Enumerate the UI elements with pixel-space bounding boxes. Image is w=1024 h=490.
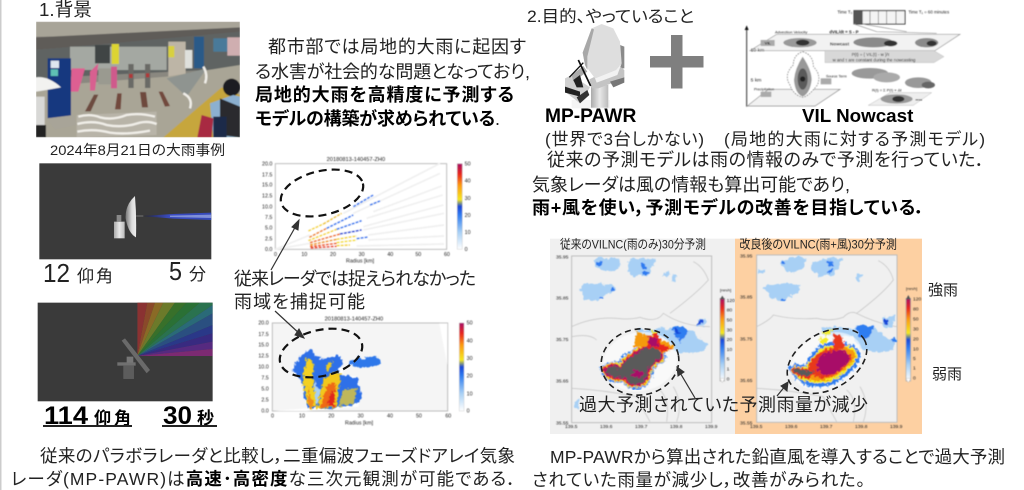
panel: conventional VILNC forecast map: 35.55 <box>556 420 569 426</box>
chart: conventional radar cross-section: 5.0 <box>265 226 272 232</box>
panel: improved VILNC forecast map: 35.75 <box>740 336 753 342</box>
chart: MP-PAWR cross-section: 15.0 <box>258 343 269 349</box>
label: 114 elevation angles: 114 <box>44 402 88 430</box>
chart: MP-PAWR cross-section: 10 <box>467 391 473 397</box>
caption: 2024 heavy rain case: 2024年8月21日の大雨事例 <box>50 142 225 158</box>
text block: MP-PAWR comparison: レーダ(MP-PAWR)は高速･高密度な三次元観測が可能である． <box>11 469 516 489</box>
chart: MP-PAWR cross-section: 0 <box>467 409 470 415</box>
panel: parabolic radar animation frame <box>39 163 211 259</box>
panel: improved VILNC forecast map: 139.9 <box>890 424 903 430</box>
diagram: VIL Nowcast schematic: Source Term <box>826 74 847 78</box>
diagram: VIL Nowcast schematic: Nowcast <box>830 42 850 47</box>
chart: conventional radar cross-section: 20180813-140457-ZH0 <box>327 157 385 163</box>
panel: conventional VILNC forecast map: 従来のVILNC(雨のみ)30分予測 <box>560 237 706 251</box>
panel: conventional VILNC forecast map: 35.85 <box>556 295 569 301</box>
chart: conventional radar cross-section: 20 <box>330 252 336 258</box>
panel: conventional VILNC forecast map: 35.65 <box>556 378 569 384</box>
label: 114 elevation angles: 仰角 <box>94 408 131 428</box>
panel: improved VILNC forecast map: 1 <box>913 366 916 372</box>
chart: MP-PAWR cross-section <box>258 316 473 427</box>
panel: improved VILNC forecast map: 10 <box>913 346 919 352</box>
callout: newly captured rain area <box>234 269 476 312</box>
panel: conventional VILNC forecast map: 35.95 <box>556 254 569 260</box>
legend label: heavy rain: 強雨 <box>928 282 958 299</box>
dashed ellipse: left map overprediction <box>596 323 684 401</box>
text block: background: る水害が社会的な問題となっており, <box>255 62 530 82</box>
chart: conventional radar cross-section: 7.5 <box>265 215 272 221</box>
chart: conventional radar cross-section: 15.0 <box>262 183 272 189</box>
arrow: to right map ellipse <box>777 382 788 396</box>
label: 5 minutes <box>169 256 206 286</box>
icon: MP-PAWR radar <box>565 24 624 108</box>
chart: MP-PAWR cross-section: 12.5 <box>258 354 269 360</box>
panel: conventional VILNC forecast map: 0 <box>727 376 730 382</box>
chart: conventional radar cross-section: 20.0 <box>262 161 272 167</box>
label: 12 elevation angles: 12 <box>43 258 70 288</box>
photo: flooded station <box>36 22 240 137</box>
chart: MP-PAWR cross-section: Radius [km] <box>345 421 374 427</box>
panel: improved VILNC forecast map: 5 <box>913 356 916 362</box>
panel: improved VILNC forecast map: 50 <box>913 317 919 323</box>
panel: conventional VILNC forecast map: 20 <box>727 337 732 343</box>
note: only three in the world: (世界で3台しかない) <box>545 130 704 149</box>
panel: improved VILNC forecast map: 20 <box>913 336 919 342</box>
chart: conventional radar cross-section: Radius [km] <box>346 258 375 264</box>
diagram: VIL Nowcast schematic: •••• <box>915 98 923 104</box>
panel: conventional VILNC forecast map: 30 <box>727 327 732 333</box>
chart: conventional radar cross-section: 50 <box>415 252 421 258</box>
diagram: VIL Nowcast schematic: 5 km <box>751 77 761 83</box>
panel: improved VILNC forecast map: 139.6 <box>785 424 798 430</box>
chart: conventional radar cross-section: 10 <box>465 230 471 236</box>
chart: conventional radar cross-section: 0.0 <box>265 247 272 253</box>
panel: improved VILNC forecast map: 35.55 <box>740 420 753 426</box>
panel: conventional VILNC forecast map: 50 <box>727 318 732 324</box>
callout: newly captured rain area: 雨域を捕捉可能 <box>234 292 365 312</box>
diagram: VIL Nowcast schematic: Time T₁ = 60 minutes <box>908 9 949 14</box>
text block: result <box>532 447 1005 490</box>
chart: conventional radar cross-section: 0 <box>274 252 277 258</box>
panel: conventional VILNC forecast map <box>550 237 735 434</box>
panel: improved VILNC forecast map: 35.95 <box>740 253 753 259</box>
label: 30 seconds: 秒 <box>197 409 214 428</box>
chart: MP-PAWR cross-section: 0.0 <box>261 409 269 415</box>
chart: MP-PAWR cross-section: 50 <box>416 414 422 420</box>
chart: MP-PAWR cross-section: 60 <box>445 414 451 420</box>
note: local heavy rain forecast model: (局地的大雨に対する予測モデル) <box>724 129 985 149</box>
label: 12 elevation angles <box>43 258 113 288</box>
panel: improved VILNC forecast map: 改良後のVILNC(雨+風)30分予測 <box>739 236 897 251</box>
chart: conventional radar cross-section: 30 <box>359 252 365 258</box>
label: 12 elevation angles: 仰角 <box>77 267 113 286</box>
page left border <box>0 0 2 490</box>
chart: MP-PAWR cross-section: 2.5 <box>261 398 269 404</box>
chart: MP-PAWR cross-section: 7.5 <box>261 376 269 382</box>
text block: result: されていた雨量が減少し，改善がみられた。 <box>532 470 865 490</box>
diagram: VIL Nowcast schematic: R(t) = Σ P(t) × Δt <box>872 87 902 92</box>
arrow: to dashed ellipse (chart 2) <box>275 311 304 338</box>
chart: conventional radar cross-section <box>262 157 471 264</box>
chart: conventional radar cross-section: 50 <box>465 161 471 167</box>
panel: conventional VILNC forecast map: 10 <box>727 347 732 353</box>
chart: conventional radar cross-section: 40 <box>465 179 471 185</box>
label: VIL Nowcast: VIL Nowcast <box>802 105 914 126</box>
diagram: VIL Nowcast schematic: Time T₀ <box>837 9 853 14</box>
chart: MP-PAWR cross-section: 30 <box>467 356 473 362</box>
chart: MP-PAWR cross-section: 50 <box>467 321 473 327</box>
text block: MP-PAWR comparison <box>11 446 516 489</box>
chart: conventional radar cross-section: 40 <box>387 252 393 258</box>
chart: conventional radar cross-section: 0 <box>465 247 468 253</box>
arrow: to left map ellipse <box>677 367 695 398</box>
diagram: VIL Nowcast schematic <box>745 9 960 107</box>
label: 5 minutes: 5 <box>169 256 182 286</box>
panel: conventional VILNC forecast map: 139.6 <box>600 424 613 430</box>
chart: MP-PAWR cross-section: 10 <box>299 414 305 420</box>
label: MP-PAWR: MP-PAWR <box>545 106 636 127</box>
panel: improved VILNC forecast map: 80 <box>913 307 919 313</box>
chart: MP-PAWR cross-section: 30 <box>358 414 364 420</box>
chart: MP-PAWR cross-section: 5.0 <box>261 387 269 393</box>
chart: conventional radar cross-section: 12.5 <box>262 193 272 199</box>
chart: MP-PAWR cross-section: 10.0 <box>258 365 269 371</box>
text block: purpose: 雨+風を使い，予測モデルの改善を目指している． <box>532 197 925 218</box>
label: 30 seconds: 30 <box>163 402 192 430</box>
text block: background: 都市部では局地的大雨に起因す <box>268 37 526 57</box>
text block: result: MP-PAWRから算出された鉛直風を導入することで過大予測 <box>550 447 1005 467</box>
text block: background <box>255 37 530 129</box>
panel: improved VILNC forecast map: 139.8 <box>855 424 868 430</box>
panel: conventional VILNC forecast map: 80 <box>727 308 732 314</box>
panel: phased array radar animation frame <box>38 303 213 401</box>
text block: MP-PAWR comparison: 従来のパラボラレーダと比較し，二重偏波フェーズドアレイ気象 <box>40 446 515 466</box>
arrow: to dashed ellipse (chart 1) <box>271 220 299 270</box>
chart: MP-PAWR cross-section: 20.0 <box>258 321 269 327</box>
panel: improved VILNC forecast map: 0 <box>913 376 916 382</box>
panel: improved VILNC forecast map <box>735 236 922 434</box>
diagram: VIL Nowcast schematic: VIL <box>765 41 771 46</box>
diagram: VIL Nowcast schematic: dVIL/dt = S - P <box>829 30 859 35</box>
panel: improved VILNC forecast map: 35.65 <box>740 378 753 384</box>
diagram: VIL Nowcast schematic: w and τ are constant during the nowcasting <box>833 58 916 63</box>
chart: conventional radar cross-section: 30 <box>465 196 471 202</box>
panel: conventional VILNC forecast map: [mm/h] <box>720 288 731 292</box>
panel: conventional VILNC forecast map: 139.8 <box>670 424 683 430</box>
panel: improved VILNC forecast map: [mm/h] <box>906 287 917 291</box>
text block: background: 局地的大雨を高精度に予測する <box>255 85 514 105</box>
callout: reduced overprediction: 過大予測されていた予測雨量が減少 <box>579 395 868 415</box>
panel: improved VILNC forecast map: 120 <box>913 297 922 303</box>
chart: conventional radar cross-section: 17.5 <box>262 172 272 178</box>
panel: conventional VILNC forecast map: 139.7 <box>635 424 648 430</box>
diagram: VIL Nowcast schematic: Advection Velocity <box>775 29 807 34</box>
text block: purpose <box>532 150 985 218</box>
chart: conventional radar cross-section: 20 <box>465 213 471 219</box>
chart: conventional radar cross-section: 10.0 <box>262 204 272 210</box>
label: 114 elevation angles <box>43 402 132 430</box>
dashed ellipse: right map reduced rain <box>776 315 878 407</box>
chart: MP-PAWR cross-section: 17.5 <box>258 332 269 338</box>
chart: MP-PAWR cross-section: 20180813-140457-ZH0 <box>325 316 383 322</box>
label: 30 seconds <box>162 402 217 430</box>
diagram: VIL Nowcast schematic: P(t) = { VIL(t) - w }/τ <box>852 52 890 57</box>
panel: improved VILNC forecast map: 139.5 <box>750 424 763 430</box>
text block: purpose: 従来の予測モデルは雨の情報のみで予測を行っていた． <box>547 150 985 170</box>
chart: MP-PAWR cross-section: 0 <box>271 414 274 420</box>
panel: conventional VILNC forecast map: 35.75 <box>556 337 569 343</box>
chart: MP-PAWR cross-section: 20 <box>328 414 334 420</box>
callout: newly captured rain area: 従来レーダでは捉えられなかった <box>234 269 476 289</box>
panel: conventional VILNC forecast map: 139.5 <box>565 424 578 430</box>
heading: 2.目的: 2.目的、やっていること <box>527 7 694 26</box>
chart: conventional radar cross-section: 60 <box>444 252 450 258</box>
chart: MP-PAWR cross-section: 40 <box>467 338 473 344</box>
label: 5 minutes: 分 <box>189 265 206 284</box>
panel: improved VILNC forecast map: 139.7 <box>820 424 833 430</box>
icon: plus sign <box>650 35 704 88</box>
text block: purpose: 気象レーダは風の情報も算出可能であり, <box>532 175 850 195</box>
panel: conventional VILNC forecast map: 139.9 <box>705 424 718 430</box>
chart: conventional radar cross-section: 2.5 <box>265 236 272 242</box>
dashed ellipse: upper echo area (chart 1) <box>276 162 368 224</box>
panel: conventional VILNC forecast map: 120 <box>727 298 735 304</box>
panel: improved VILNC forecast map: 30 <box>913 327 919 333</box>
panel: conventional VILNC forecast map: 1 <box>727 366 730 372</box>
chart: MP-PAWR cross-section: 40 <box>387 414 393 420</box>
chart: conventional radar cross-section: 10 <box>301 252 307 258</box>
dashed ellipse: upper echo area (chart 2) <box>275 321 367 385</box>
chart: MP-PAWR cross-section: 20 <box>467 374 473 380</box>
panel: conventional VILNC forecast map: 5 <box>727 357 730 363</box>
text block: background: モデルの構築が求められている. <box>255 108 500 129</box>
diagram: VIL Nowcast schematic: Precipitation <box>754 88 774 92</box>
diagram: VIL Nowcast schematic: 10 km <box>751 47 764 53</box>
panel: improved VILNC forecast map: 35.85 <box>740 294 753 300</box>
legend label: light rain: 弱雨 <box>932 366 962 383</box>
